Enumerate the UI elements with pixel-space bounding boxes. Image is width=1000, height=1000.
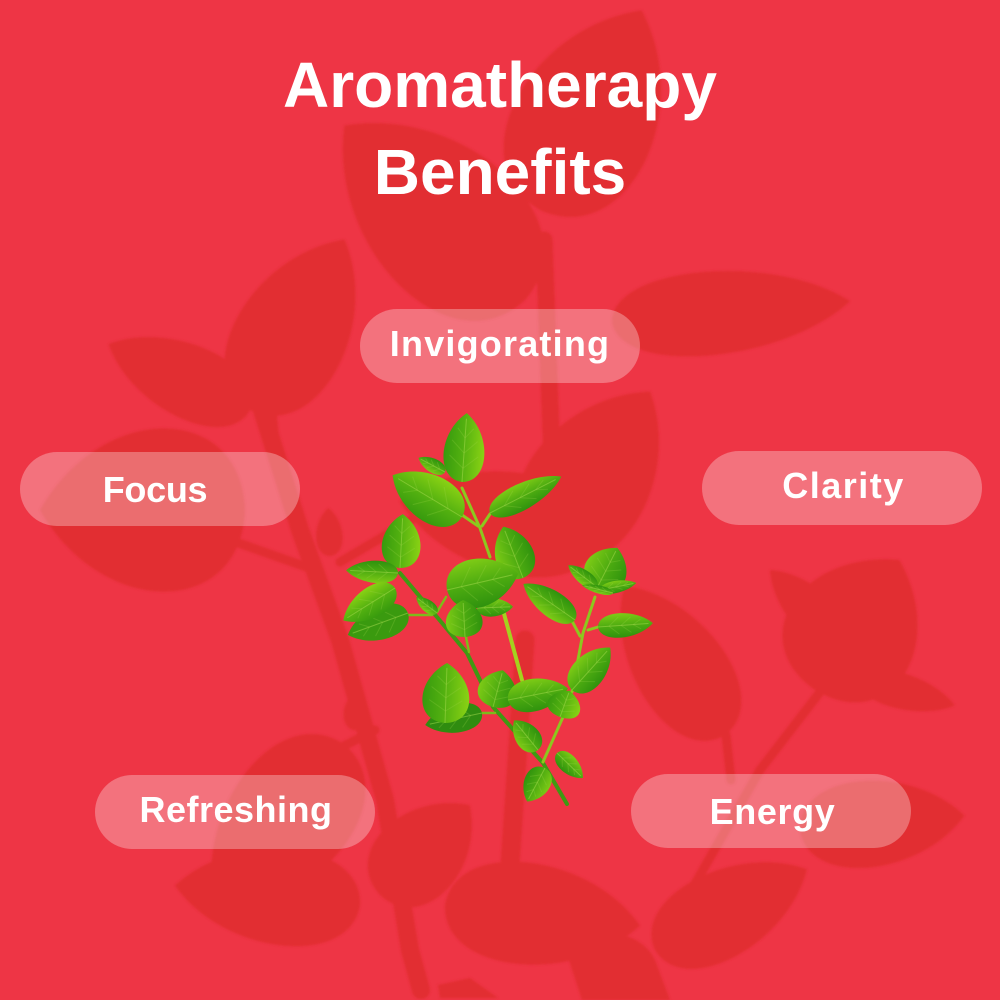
title: Aromatherapy [283, 49, 717, 121]
pill: Energy: Energy [710, 791, 835, 832]
pill: Energy [631, 774, 911, 848]
pill: Focus [20, 452, 300, 526]
pill: Invigorating [360, 309, 640, 383]
pill: Refreshing [95, 775, 375, 849]
pill: Clarity: Clarity [782, 465, 905, 506]
pill: Focus: Focus [103, 469, 207, 510]
pill: Clarity [702, 451, 982, 525]
pill: Refreshing: Refreshing [139, 789, 333, 830]
pill: Invigorating: Invigorating [390, 323, 610, 364]
title [283, 49, 717, 208]
title: Benefits [374, 136, 626, 208]
